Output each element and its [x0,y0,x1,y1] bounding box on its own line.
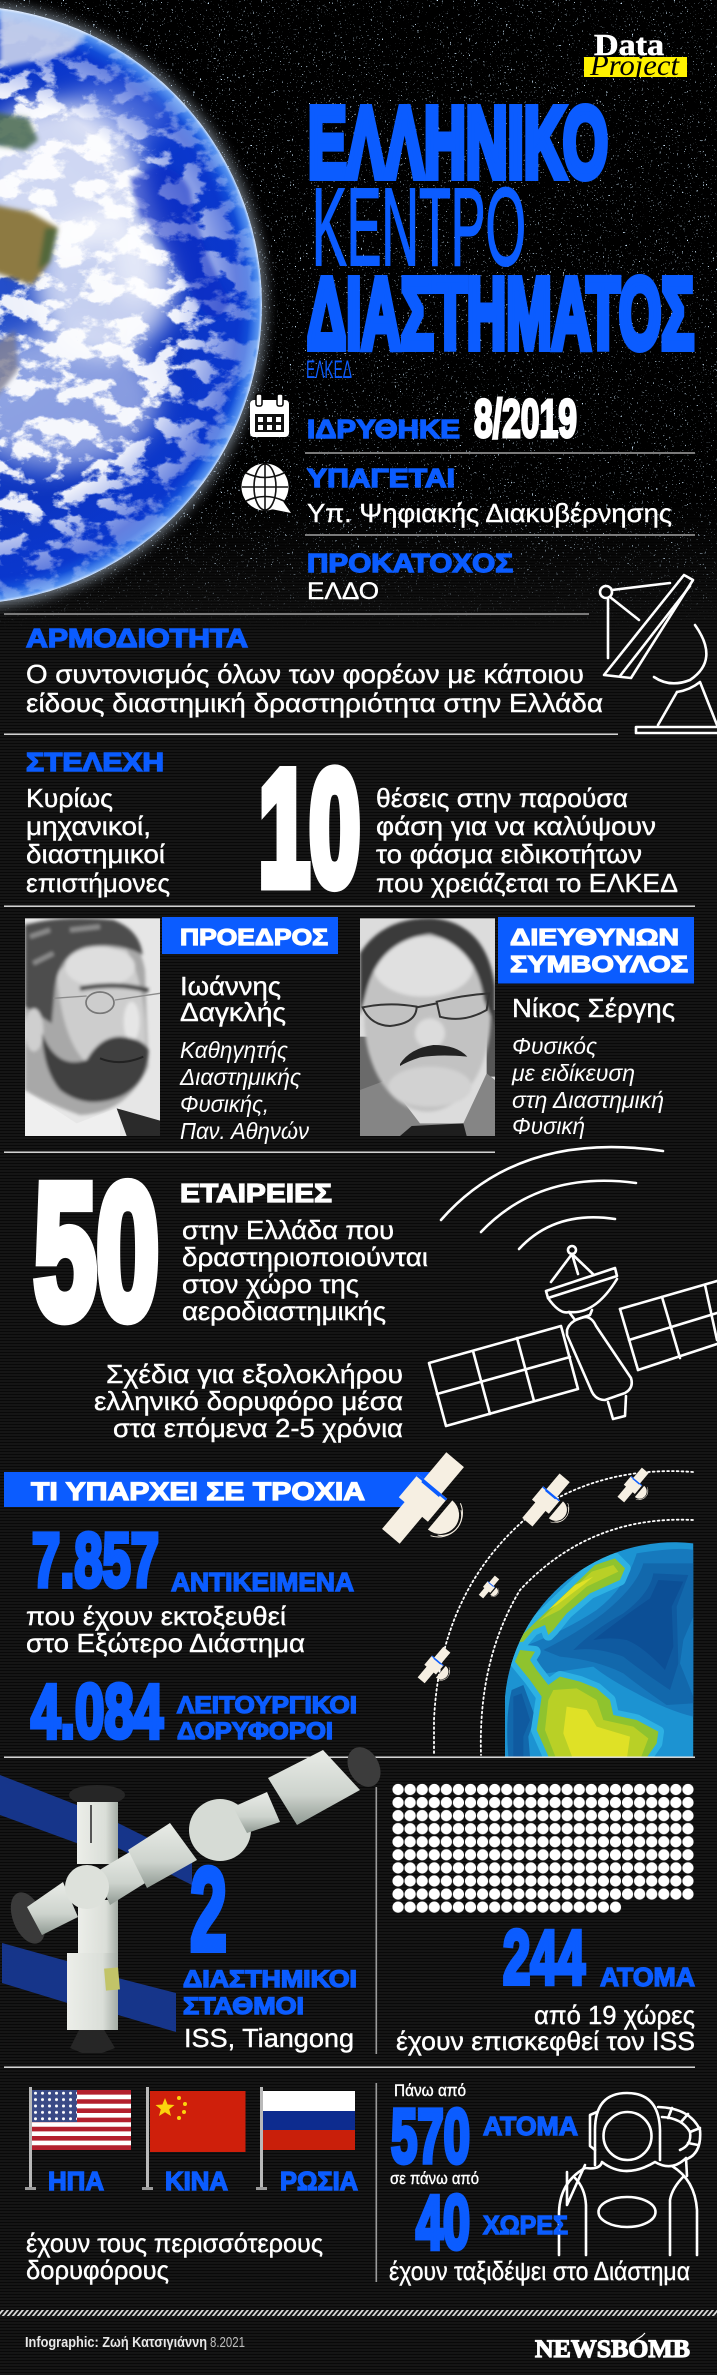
band: what is in orbit: ΤΙ ΥΠΑΡΧΕΙ ΣΕ ΤΡΟΧΙΑ [31,1478,365,1506]
logo: Data Project: Project [589,49,680,82]
reports to: ΥΠΑΓΕΤΑΙ [307,463,455,493]
CEO name and title: Φυσικός [512,1033,598,1059]
companies text [180,1178,428,1326]
most satellites text [26,2228,323,2285]
icon: calendar [250,394,289,437]
icon: satellite 4 [477,1574,506,1604]
staff: Κυρίως [26,783,113,813]
objects launched: 7.857 [32,1518,159,1604]
solar panels [0,1775,192,2032]
orbits [434,1471,693,1755]
people in space: 40 [416,2180,470,2266]
country labels: ΗΠΑ [48,2166,104,2196]
people in space: σε πάνω από [390,2169,479,2188]
big number 2: 2 [190,1844,227,1976]
CEO name and title: Φυσική [512,1113,585,1139]
cloud mass [0,80,175,470]
244 people: 244 [503,1916,585,2000]
CEO name and title: με ειδίκευση [511,1060,635,1086]
companies text: ΕΤΑΙΡΕΙΕΣ [180,1178,332,1208]
president name and title: Παν. Αθηνών [180,1118,309,1144]
president name and title: Φυσικής, [180,1091,269,1117]
founded row: 8/2019 [474,389,577,449]
label: CEO [498,917,694,984]
hatched divider [0,2310,717,2316]
photo: CEO [360,918,495,1136]
staff positions: θέσεις στην παρούσα [376,783,628,813]
cyan halo around land [513,1558,658,1760]
staff [26,747,170,898]
label: CEO: ΔΙΕΥΘΥΝΩΝ [510,924,679,950]
companies text: στον χώρο της [182,1269,359,1299]
staff: μηχανικοί, [26,811,151,841]
title: ΕΛΚΕΔ [306,356,352,384]
swirl of open ocean [130,167,230,318]
band: what is in orbit [4,1472,432,1507]
flag: Russia [256,2087,355,2190]
244 people: ΑΤΟΜΑ [600,1962,695,1992]
land [513,1558,658,1760]
orbit map earth [503,1540,695,1760]
competence [26,623,603,718]
icon: large satellite [376,1447,490,1566]
staff: ΣΤΕΛΕΧΗ [26,747,164,777]
polar cap [0,0,90,68]
predecessor: ΕΛΔΟ [307,578,379,605]
satellite plans text: ελληνικό δορυφόρο μέσα [94,1386,403,1416]
label: president [162,917,338,954]
objects launched [26,1518,354,1658]
icon: satellite 5 [415,1645,461,1692]
logo: Data Project [584,27,687,82]
operating satellites [31,1670,357,1754]
icon: satellite 3 [615,1466,658,1511]
staff positions: που χρειάζεται το ΕΛΚΕΔ [376,868,678,898]
icon: satellite 2 [519,1471,585,1539]
predecessor [307,548,513,605]
competence: είδους διαστημική δραστηριότητα στην Ελλάδα [26,688,603,718]
244 people: από 19 χώρες [534,2000,695,2030]
operating satellites: ΔΟΡΥΦΟΡΟΙ [177,1718,333,1745]
icon: globe speech bubble [242,464,291,513]
founded row: ΙΔΡΥΘΗΚΕ [307,414,460,444]
credit: Infographic: Ζωή Κατσιγιάννη [25,2334,207,2351]
objects launched: που έχουν εκτοξευθεί [26,1601,286,1631]
reports to [307,463,672,528]
staff: διαστημικοί [26,839,165,869]
icon: satellite outline [429,1147,717,1426]
people in space: 570 [391,2094,470,2180]
president name and title [179,971,309,1144]
most satellites text: δορυφόρους [26,2255,169,2285]
people in space: Πάνω από [394,2081,466,2100]
competence: ΑΡΜΟΔΙΟΤΗΤΑ [26,623,248,653]
icon: astronaut [559,2093,700,2255]
operating satellites: ΛΕΙΤΟΥΡΓΙΚΟΙ [177,1692,357,1719]
logo: Newsbomb: NEWSBOMB [535,2336,690,2363]
companies text: αεροδιαστημικής [182,1296,386,1326]
staff positions: φάση για να καλύψουν [376,811,656,841]
land masses [0,112,58,400]
most satellites text: έχουν τους περισσότερους [26,2228,323,2258]
staff: επιστήμονες [26,868,170,898]
flag: China [142,2087,246,2190]
photo: president [25,918,160,1136]
objects launched: ΑΝΤΙΚΕΙΜΕΝΑ [171,1567,354,1597]
competence: Ο συντονισμός όλων των φορέων με κάποιου [26,659,584,689]
satellite plans text: Σχέδια για εξολοκλήρου [106,1359,403,1389]
people in space: ΧΩΡΕΣ [483,2210,568,2240]
illustration: space station [0,1741,387,2053]
people in space [389,2081,690,2286]
space stations text: ISS, Tiangong [184,2023,354,2053]
icon: satellite dish [600,575,717,733]
dot matrix: 244 people [392,1783,694,1914]
logo: Data Project: Data [594,27,665,62]
companies text: δραστηριοποιούνται [182,1242,428,1272]
predecessor: ΠΡΟΚΑΤΟΧΟΣ [307,548,513,578]
title [306,87,694,384]
satellite plans text [94,1359,403,1443]
planet earth [0,0,266,610]
244 people [396,1916,695,2056]
big number 10: 10 [259,738,360,919]
CEO name and title: Νίκος Σέργης [512,993,675,1023]
president name and title: Ιωάννης [180,971,281,1001]
companies text: στην Ελλάδα που [182,1215,394,1245]
big number 50: 50 [34,1146,159,1358]
station caps [4,1741,387,2053]
operating satellites: 4.084 [31,1670,163,1754]
country labels: ΡΩΣΙΑ [280,2166,358,2196]
flag: USA [25,2087,131,2190]
modules [77,1802,118,1864]
space stations text: ΣΤΑΘΜΟΙ [183,1993,304,2020]
satellite plans text: στα επόμενα 2-5 χρόνια [113,1413,403,1443]
CEO name and title: στη Διαστημική [512,1087,664,1113]
founded row [307,389,577,449]
reports to: Υπ. Ψηφιακής Διακυβέρνησης [307,498,672,528]
staff positions [376,783,678,898]
244 people: έχουν επισκεφθεί τον ISS [396,2026,695,2056]
president name and title: Διαστημικής [179,1064,302,1090]
people in space: ΑΤΟΜΑ [483,2111,578,2141]
credit: 8.2021 [210,2334,245,2351]
CEO name and title [511,993,675,1139]
objects launched: στο Εξώτερο Διάστημα [26,1628,305,1658]
country labels [48,2166,358,2196]
staff positions: το φάσμα ειδικοτήτων [376,839,642,869]
space stations text [183,1966,357,2053]
label: president: ΠΡΟΕΔΡΟΣ [180,924,328,950]
starfield [0,0,717,640]
president name and title: Καθηγητής [180,1037,289,1063]
space stations text: ΔΙΑΣΤΗΜΙΚΟΙ [183,1966,357,1993]
label: CEO: ΣΥΜΒΟΥΛΟΣ [510,951,688,977]
country labels: ΚΙΝΑ [165,2166,228,2196]
president name and title: Δαγκλής [180,997,286,1027]
